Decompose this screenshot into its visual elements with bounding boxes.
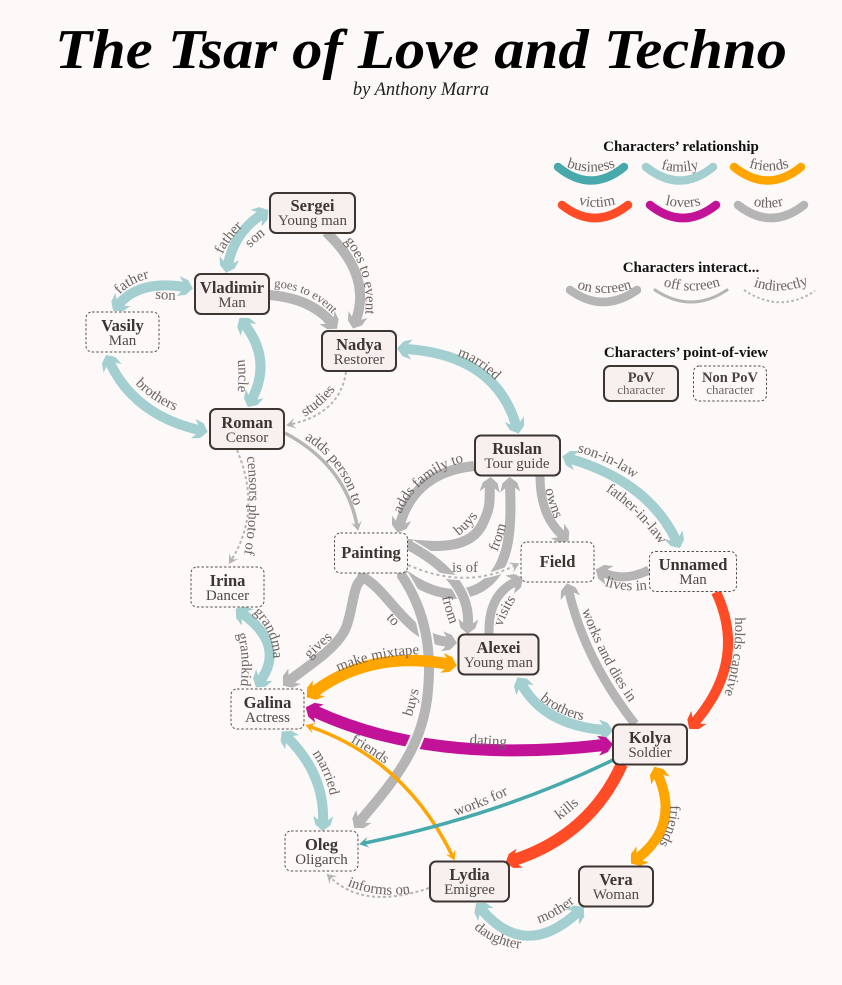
- legend: characters' point-of-view: PoV: [628, 370, 655, 386]
- edge: Galina and Kolya, dating: dating: [470, 734, 506, 750]
- legend: characters' relationship: victim: [580, 196, 616, 208]
- edge: Nadya and Ruslan, married: [397, 340, 524, 434]
- edge: Unnamed to Field, lives in: lives in: [604, 576, 647, 590]
- node: Irina: Dancer: [206, 588, 249, 604]
- node: Lydia: Lydia: [449, 865, 490, 884]
- node: Roman: Roman: [221, 413, 273, 432]
- node: Painting: [334, 533, 408, 573]
- node: Vera: [579, 866, 653, 906]
- edge: Sergei to Nadya, goes to event: [322, 234, 374, 328]
- edge: Alexei to Field, visits: visits: [496, 596, 515, 625]
- edge: Vladimir and Roman, uncle: uncle: [238, 360, 249, 392]
- node: Alexei: Young man: [464, 655, 533, 671]
- edge: Ruslan and Unnamed, in-laws: father-in-law: [606, 484, 666, 542]
- node: Alexei: Alexei: [477, 638, 521, 657]
- node: Roman: Censor: [226, 430, 268, 446]
- edge: Lydia and Vera, family: mother: [534, 893, 578, 927]
- node: Nadya: Restorer: [334, 352, 384, 368]
- edge: Vladimir and Roman, uncle: [237, 318, 266, 407]
- legend: characters' point-of-view: character: [617, 382, 665, 397]
- node: Vera: Woman: [593, 887, 640, 903]
- edge: Kolya to Field, works and dies in: [560, 583, 638, 724]
- edge: Vasily and Roman, brothers: brothers: [136, 376, 177, 410]
- subtitle: by Anthony Marra: [353, 80, 489, 100]
- node: Lydia: Emigree: [444, 882, 495, 898]
- edge: Kolya to Oleg, works for: works for: [452, 783, 510, 820]
- edge: Ruslan to Painting, adds family to: adds family to: [396, 456, 462, 513]
- edge: Galina and Oleg, married: married: [309, 747, 342, 797]
- edge: Vasily and Roman, brothers: [102, 354, 208, 438]
- legend: characters interact: off screen: [664, 278, 720, 291]
- edge: Kolya to Lydia, kills: kills: [552, 795, 582, 823]
- edge: Kolya to Oleg, works for: [359, 758, 613, 848]
- edge: Alexei and Kolya, brothers: [514, 677, 612, 740]
- edge: Sergei and Vladimir, family: father: [214, 222, 242, 254]
- edge: Painting to Ruslan, from: from: [488, 524, 506, 552]
- legend: characters' point-of-view: [604, 345, 768, 401]
- node: Vera: Vera: [599, 870, 633, 889]
- node: Nadya: [322, 331, 396, 371]
- edge: Ruslan to Field, owns: owns: [546, 488, 560, 518]
- edge: Alexei and Galina, make mixtape: [306, 647, 457, 700]
- node: Oleg: Oleg: [305, 835, 339, 854]
- edge: Lydia and Vera, family: [474, 897, 584, 948]
- edge: Galina and Oleg, married: [280, 730, 340, 831]
- node: Sergei: Young man: [278, 213, 347, 229]
- edge: Irina and Galina, family: grandma: [252, 609, 280, 658]
- edge: Sergei and Vladimir, family: son: [246, 230, 266, 248]
- legend: characters' relationship: other: [754, 197, 782, 208]
- edge: Painting to Galina, gives: [283, 573, 370, 688]
- node: Unnamed: Man: [679, 572, 707, 588]
- node: Kolya: [613, 724, 687, 764]
- node: Alexei: [458, 634, 538, 674]
- node: Ruslan: Ruslan: [492, 439, 542, 458]
- edge: Painting to Ruslan, from: [397, 477, 520, 599]
- node: Vasily: Vasily: [101, 316, 144, 335]
- node: Oleg: Oligarch: [295, 852, 348, 868]
- edge: Painting to Field, is of: [408, 562, 520, 580]
- edge: Unnamed to Kolya, holds captive: [687, 592, 746, 730]
- node: Irina: [191, 567, 264, 607]
- legend: characters' relationship: [554, 139, 808, 222]
- edge: Alexei and Galina, make mixtape: make mixtape: [336, 647, 419, 672]
- node: Lydia: [430, 862, 509, 902]
- edge: Sergei and Vladimir, family: [214, 207, 268, 273]
- edge: Painting to Ruslan, buys: [408, 477, 500, 551]
- edge: Painting to Field, is of: is of: [452, 562, 478, 572]
- edge: Roman to Painting, adds person to: adds person to: [306, 434, 360, 505]
- node: Vladimir: Man: [218, 295, 246, 311]
- edge: Kolya to Field, works and dies in: works and dies in: [582, 608, 634, 702]
- edge: Lydia to Oleg, informs on: [326, 874, 429, 898]
- node: Ruslan: [475, 436, 560, 476]
- edge: Vladimir and Vasily, family: [111, 272, 193, 312]
- edge: Galina and Kolya, dating: [306, 702, 612, 756]
- node: Unnamed: [650, 552, 736, 592]
- legend: characters' relationship: lovers: [665, 194, 700, 208]
- node: Ruslan: Tour guide: [484, 456, 550, 472]
- edge: Lydia and Vera, family: daughter: [471, 919, 522, 953]
- edge: Galina and Lydia, friends: [305, 723, 456, 860]
- node: Kolya: Kolya: [629, 728, 671, 747]
- edge: Vladimir to Nadya, goes to event: goes to event: [274, 281, 336, 314]
- node: Irina: Irina: [210, 571, 245, 590]
- legend: characters' point-of-view: character: [706, 382, 754, 397]
- legend: characters interact: [566, 260, 816, 306]
- node: Unnamed: Unnamed: [659, 555, 727, 574]
- edge: Kolya to Lydia, kills: [506, 764, 628, 868]
- node: Roman: [210, 409, 284, 449]
- node: Vasily: [86, 312, 159, 352]
- node: Galina: [231, 689, 304, 729]
- legend: characters' point-of-view: Characters’ point-of-view: [604, 345, 768, 361]
- edge: Roman to Painting, adds person to: [285, 432, 362, 531]
- node: Painting: Painting: [341, 543, 402, 562]
- node: Field: [521, 542, 594, 582]
- edge: Nadya to Roman, studies: [286, 372, 347, 428]
- node: Oleg: [285, 831, 358, 871]
- edge: Vladimir to Nadya, goes to event: [270, 281, 338, 330]
- legend: characters interact: Characters interact...: [623, 260, 760, 276]
- edge: Roman to Irina, censors photo of: censors photo of: [244, 456, 260, 556]
- edge: Vladimir and Vasily, family: son: [156, 292, 176, 300]
- node: Galina: Actress: [245, 710, 290, 726]
- legend: characters' relationship: family: [662, 160, 698, 174]
- edge: Kolya and Vera, friends: friends: [655, 805, 682, 850]
- edge: Unnamed to Kolya, holds captive: holds captive: [724, 617, 746, 696]
- legend: characters' relationship: business: [568, 157, 614, 172]
- legend: characters' relationship: friends: [749, 158, 788, 171]
- edge: Ruslan and Unnamed, in-laws: [562, 446, 684, 548]
- edge: Painting to Alexei, from: [408, 540, 478, 634]
- edge: Painting to Ruslan, buys: buys: [452, 512, 477, 536]
- edge: Painting to Oleg, buys: [352, 572, 434, 828]
- edge: Vladimir and Vasily, family: father: [114, 272, 148, 294]
- edge: Nadya and Ruslan, married: married: [458, 350, 502, 380]
- legend: characters' point-of-view: Non PoV: [702, 370, 759, 386]
- node: Vladimir: [195, 274, 269, 314]
- node: Field: Field: [540, 552, 575, 571]
- edge: Alexei to Field, visits: [484, 574, 522, 634]
- edge: Painting to Oleg, buys: buys: [402, 689, 420, 716]
- title: The Tsar of Love and Techno: [55, 19, 787, 81]
- node: Vladimir: Vladimir: [200, 278, 264, 297]
- legend: characters interact: on screen: [578, 282, 632, 294]
- edge: Painting to Alexei, from: from: [442, 596, 456, 624]
- legend: characters' relationship: Characters’ relationship: [603, 139, 759, 155]
- edge: Galina and Lydia, friends: friends: [348, 731, 392, 768]
- edge: Painting to Alexei, to: to: [387, 614, 398, 626]
- edge: Painting to Galina, gives: gives: [306, 634, 332, 660]
- node: Kolya: Soldier: [628, 745, 672, 761]
- edge: Lydia to Oleg, informs on: informs on: [346, 875, 411, 899]
- edge: Painting to Alexei, to: [357, 573, 457, 652]
- node: Sergei: Sergei: [291, 196, 335, 215]
- edge: Alexei and Kolya, brothers: brothers: [540, 692, 584, 720]
- edge: Unnamed to Field, lives in: [596, 564, 650, 590]
- edge: Ruslan and Unnamed, in-laws: son-in-law: [578, 446, 638, 477]
- edge: Ruslan to Painting, adds family to: [392, 456, 474, 532]
- legend: characters interact: indirectly: [754, 277, 806, 290]
- node: Galina: Galina: [244, 693, 291, 712]
- node: Nadya: Nadya: [336, 335, 382, 354]
- edge: Nadya to Roman, studies: studies: [302, 386, 334, 416]
- edge: Irina and Galina, family: [235, 607, 280, 688]
- node: Vasily: Man: [109, 333, 137, 349]
- edge: Sergei to Nadya, goes to event: goes to event: [343, 238, 374, 314]
- node: Sergei: [270, 193, 355, 233]
- edge: Ruslan to Field, owns: [536, 476, 570, 542]
- edge: Kolya and Vera, friends: [630, 766, 681, 866]
- edge: Roman to Irina, censors photo of: [228, 450, 260, 564]
- edge: Irina and Galina, family: grandkid: [233, 631, 254, 688]
